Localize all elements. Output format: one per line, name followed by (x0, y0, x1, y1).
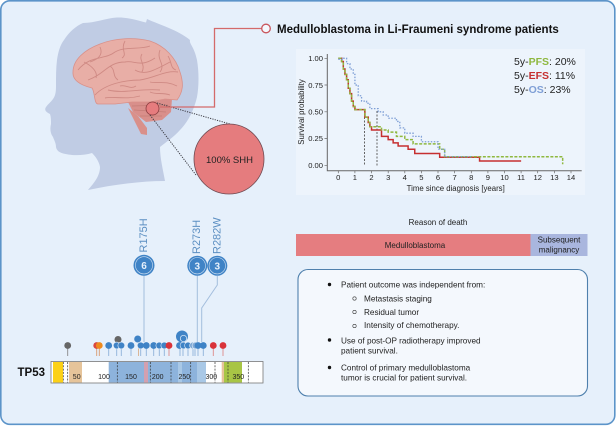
x axis labels: 0 (336, 173, 340, 182)
bullet list: patient survival. (341, 346, 398, 356)
title: Medulloblastoma in Li-Fraumeni syndrome patients (277, 24, 559, 36)
hotspot: R273H: 3 (195, 262, 201, 272)
connector line to title (160, 28, 262, 107)
y axis title: Survival probability (297, 79, 306, 145)
x axis labels: 3 (386, 173, 390, 182)
chart: TP53 lollipop plot (18, 217, 263, 383)
tumor marker (146, 102, 159, 115)
bullet list: Intensity of chemotherapy. (364, 321, 459, 330)
hotspot: R282W: 3 (215, 262, 221, 272)
title marker (262, 24, 270, 33)
y axis labels: 0.50 (308, 108, 323, 116)
x axis labels: 14 (567, 173, 575, 182)
x axis title: Time since diagnosis [years] (407, 184, 505, 193)
axes (327, 54, 582, 171)
y axis labels: 1.00 (308, 54, 323, 63)
gene bar: 300 (205, 374, 217, 381)
curves (338, 58, 563, 164)
hotspot: R175H (134, 218, 154, 276)
x axis labels: 11 (517, 173, 525, 182)
bullet list: Patient outcome was independent from: (341, 280, 485, 290)
x axis labels: 9 (486, 173, 490, 182)
y axis labels (308, 54, 323, 170)
chart: Kaplan-Meier survival curves (296, 49, 585, 195)
illustration: child head with brain (45, 17, 264, 194)
y axis labels: 0.75 (308, 81, 323, 90)
bullet list: Metastasis staging (364, 294, 432, 304)
x axis labels: 4 (403, 173, 407, 182)
x axis labels: 2 (369, 173, 374, 182)
hotspot: R282W (207, 217, 227, 276)
callout circle: 100% SHH (194, 124, 264, 194)
hotspot: R175H: 6 (141, 261, 147, 272)
y axis labels: 0.25 (308, 134, 323, 143)
x axis labels (336, 173, 575, 182)
hotspot: R282W: R282W (212, 217, 224, 254)
legend: 5y-EFS: 11% (514, 70, 575, 82)
dotted zoom lines (150, 103, 230, 175)
callout circle: 100% SHH: 100% SHH (206, 155, 253, 166)
mutation dots (64, 330, 226, 349)
x axis labels: 13 (550, 173, 559, 182)
bullet list: Residual tumor (364, 308, 419, 317)
stacked bar: reason of death: Medulloblastoma (385, 241, 446, 250)
median lines (364, 110, 377, 166)
panel: key conclusions (298, 270, 588, 396)
icon: brain (73, 39, 182, 135)
gene bar: 200 (152, 374, 164, 381)
x axis labels: 10 (500, 173, 509, 182)
bullet list (328, 280, 485, 382)
gene bar: 150 (125, 374, 137, 381)
legend: 5y-OS: 23% (514, 84, 571, 96)
legend (514, 56, 576, 96)
hotspot: R175H: R175H (138, 218, 150, 252)
hotspot: R273H (187, 220, 207, 276)
stacked bar: reason of death (296, 234, 588, 256)
gene bar (51, 362, 263, 383)
x axis labels: 7 (452, 173, 457, 182)
bullet list: tumor is crucial for patient survival. (341, 374, 467, 382)
hotspot stems (144, 275, 217, 342)
x axis labels: 12 (533, 173, 542, 182)
hotspot: R273H: R273H (191, 220, 203, 254)
heading: reason of death: Reason of death (409, 218, 467, 227)
gene bar: 100 (98, 374, 110, 381)
x axis labels: 5 (419, 173, 424, 182)
stacked bar: reason of death: Subsequent (538, 236, 581, 244)
icon: head silhouette (45, 17, 198, 190)
gene bar: 50 (73, 374, 81, 381)
legend: 5y-PFS: 20% (514, 56, 576, 68)
gene bar: 350 (232, 374, 244, 381)
y axis labels: 0.00 (308, 161, 323, 170)
bullet list: Control of primary medulloblastoma (341, 364, 471, 372)
mutation stems (68, 345, 223, 356)
bullet list: Use of post-OP radiotherapy improved (341, 336, 481, 346)
gene label: TP53 (18, 367, 45, 379)
x axis labels: 6 (436, 173, 440, 182)
stacked bar: reason of death: malignancy (539, 246, 579, 254)
x axis labels: 8 (469, 173, 473, 182)
gene bar: 250 (178, 374, 190, 381)
x axis labels: 1 (353, 173, 357, 182)
